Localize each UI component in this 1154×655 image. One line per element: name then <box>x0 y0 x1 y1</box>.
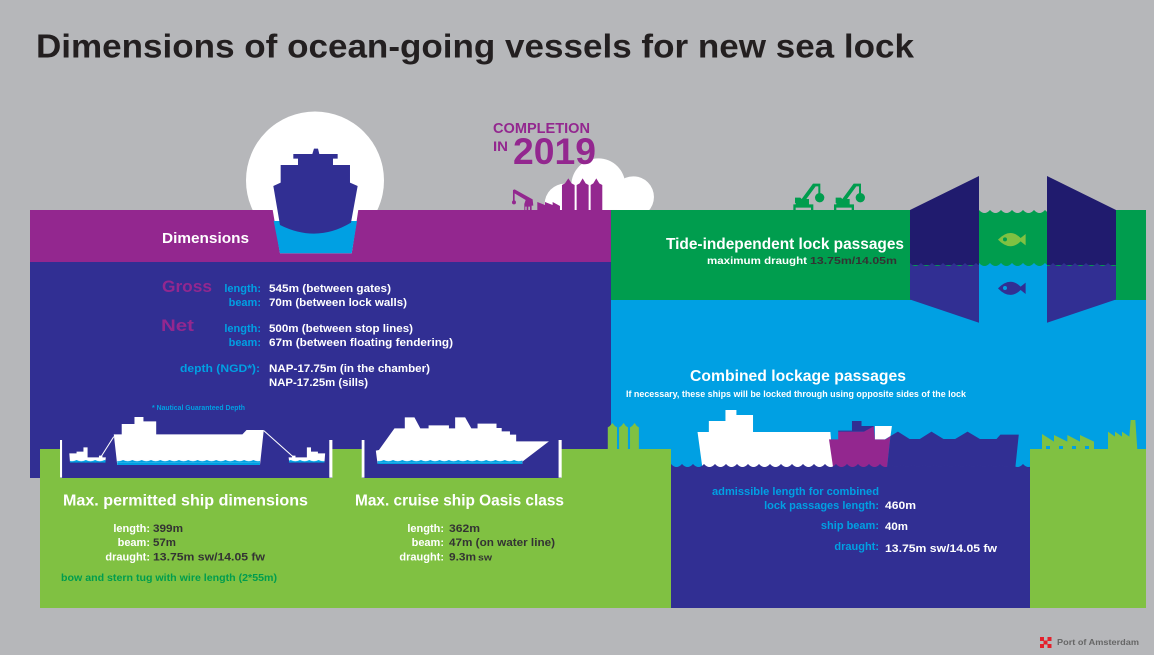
purple ship navy funnel <box>838 421 874 432</box>
purple ship white cabin <box>875 426 892 439</box>
right gate surface <box>1047 263 1116 267</box>
heading: max cruise: Max. cruise ship Oasis class <box>355 492 564 510</box>
spec values: NAP-17.75m (in the chamber) <box>269 363 430 375</box>
green factories right <box>1042 420 1137 450</box>
chamber high water surface <box>979 210 1047 214</box>
title: Dimensions of ocean-going vessels for new sea lock <box>36 28 914 66</box>
tug wire note: bow and stern tug with wire length (2*55m) <box>61 573 277 584</box>
maximum draught line: 13.75m/14.05m <box>810 255 897 267</box>
icon: purple ship <box>829 426 890 468</box>
combined lockage ships <box>698 410 1019 468</box>
lock gates with fish <box>910 170 1116 327</box>
cruise waterline <box>378 460 522 464</box>
permitted values <box>153 523 265 564</box>
left gate surface <box>910 263 979 267</box>
white sun circle behind ship <box>246 112 384 210</box>
tow wires <box>100 431 294 458</box>
cruise ship specifications: length: <box>407 523 444 535</box>
lock notch with water <box>273 210 358 253</box>
panel: navy water <box>671 464 1030 608</box>
right gate upper <box>1047 176 1116 265</box>
completion label: IN <box>493 138 508 154</box>
spec values: NAP-17.25m (sills) <box>269 377 368 389</box>
icon: green fish <box>998 233 1026 246</box>
permitted ship specifications: beam: <box>118 537 150 549</box>
skyline: cloud, towers, crane and factory <box>512 158 654 224</box>
completion label: COMPLETION <box>493 121 590 137</box>
combined lockage values: 460m <box>885 500 916 512</box>
permitted values: 13.75m sw/14.05 fw <box>153 552 265 564</box>
combined lockage specifications: admissible length for combined <box>712 486 879 498</box>
chamber low water surface <box>979 263 1047 267</box>
green towers left <box>608 423 639 450</box>
spec labels: depth (NGD*): <box>180 363 260 375</box>
icon: max permitted ship <box>114 417 264 465</box>
icon: ship front view <box>273 149 358 234</box>
navy water body <box>671 468 1030 608</box>
spec labels: beam: <box>229 337 261 349</box>
spec values: 500m (between stop lines) <box>269 323 413 335</box>
spec values: 545m (between gates) <box>269 283 391 295</box>
combined lockage specifications: ship beam: <box>821 520 879 532</box>
combined lockage values: 13.75m sw/14.05 fw <box>885 543 997 555</box>
icon: navy ship <box>887 432 1019 468</box>
ships in lock: permitted and cruise <box>60 417 562 478</box>
panel: navy lock specifications <box>30 262 611 478</box>
panel: green ground right <box>1030 449 1146 608</box>
ship waterline <box>117 460 260 465</box>
heading: combined lockage: Combined lockage passages <box>690 368 906 385</box>
sky gap between gates <box>979 170 1047 214</box>
spec labels: beam: <box>229 297 261 309</box>
icon: stern tug <box>289 447 325 462</box>
maximum draught line: maximum draught <box>707 255 808 267</box>
left gate upper <box>910 176 979 265</box>
maximum draught line <box>707 255 897 267</box>
stern tug waterline <box>289 460 324 463</box>
logo: Port of Amsterdam <box>1040 637 1139 648</box>
cruise values: 47m (on water line) <box>449 537 555 549</box>
lock walls <box>60 440 562 478</box>
spec labels <box>180 283 261 375</box>
net heading: Net <box>161 316 194 335</box>
icon: cruise ship <box>376 417 549 464</box>
permitted values: 399m <box>153 523 183 535</box>
gross and net specification rows <box>161 277 453 389</box>
combined lockage values <box>885 500 997 555</box>
spec values: 67m (between floating fendering) <box>269 337 453 349</box>
left gate lower <box>910 267 979 323</box>
panel: purple dimensions band <box>30 210 611 262</box>
panel: blue combined lockage water <box>611 300 1146 468</box>
cruise ship specifications: draught: <box>399 552 444 564</box>
spec labels: length: <box>224 283 261 295</box>
combined lockage note: If necessary, these ships will be locked through using opposite sides of the lock <box>626 389 967 399</box>
logo: Port of Amsterdam: Port of Amsterdam <box>1057 637 1139 647</box>
cruise values: 9.3m <box>449 552 476 564</box>
combined lockage specifications <box>712 486 997 555</box>
combined lockage specifications: draught: <box>834 541 879 553</box>
cruise ship specifications <box>399 523 555 564</box>
factory windows <box>1046 446 1089 449</box>
heading: dimensions: Dimensions <box>162 230 249 247</box>
cruise ship specifications: beam: <box>412 537 444 549</box>
bow tug waterline <box>70 460 106 463</box>
chamber green water <box>979 214 1047 266</box>
panel: green ground left <box>40 449 671 608</box>
permitted ship specifications: length: <box>113 523 150 535</box>
cruise values <box>449 523 555 564</box>
right gate lower <box>1047 267 1116 323</box>
chamber blue water <box>979 267 1047 327</box>
spec labels: length: <box>224 323 261 335</box>
heading: max permitted: Max. permitted ship dimensions <box>63 492 308 510</box>
spec values: 70m (between lock walls) <box>269 297 407 309</box>
heading: tide-independent: Tide-independent lock passages <box>666 236 904 253</box>
footnote: * Nautical Guaranteed Depth <box>152 405 245 412</box>
permitted values: 57m <box>153 537 176 549</box>
panel: green tide-independent band <box>611 210 1146 300</box>
spec values <box>269 283 453 389</box>
completion label: 2019 <box>513 131 596 172</box>
permitted ship specifications <box>105 523 265 564</box>
factory with chimney <box>1108 420 1137 450</box>
cruise values: 362m <box>449 523 480 535</box>
icon: green cranes <box>793 184 865 210</box>
icon: white ship <box>698 410 833 468</box>
combined lockage values: 40m <box>885 521 908 533</box>
permitted ship specifications: draught: <box>105 552 150 564</box>
combined lockage specifications: lock passages length: <box>764 500 879 512</box>
icon: navy fish <box>998 282 1026 295</box>
cruise values: sw <box>478 552 493 562</box>
completion label <box>493 121 596 172</box>
crane two <box>834 184 865 210</box>
icon: bow tug <box>69 447 106 462</box>
gross heading: Gross <box>162 277 212 296</box>
